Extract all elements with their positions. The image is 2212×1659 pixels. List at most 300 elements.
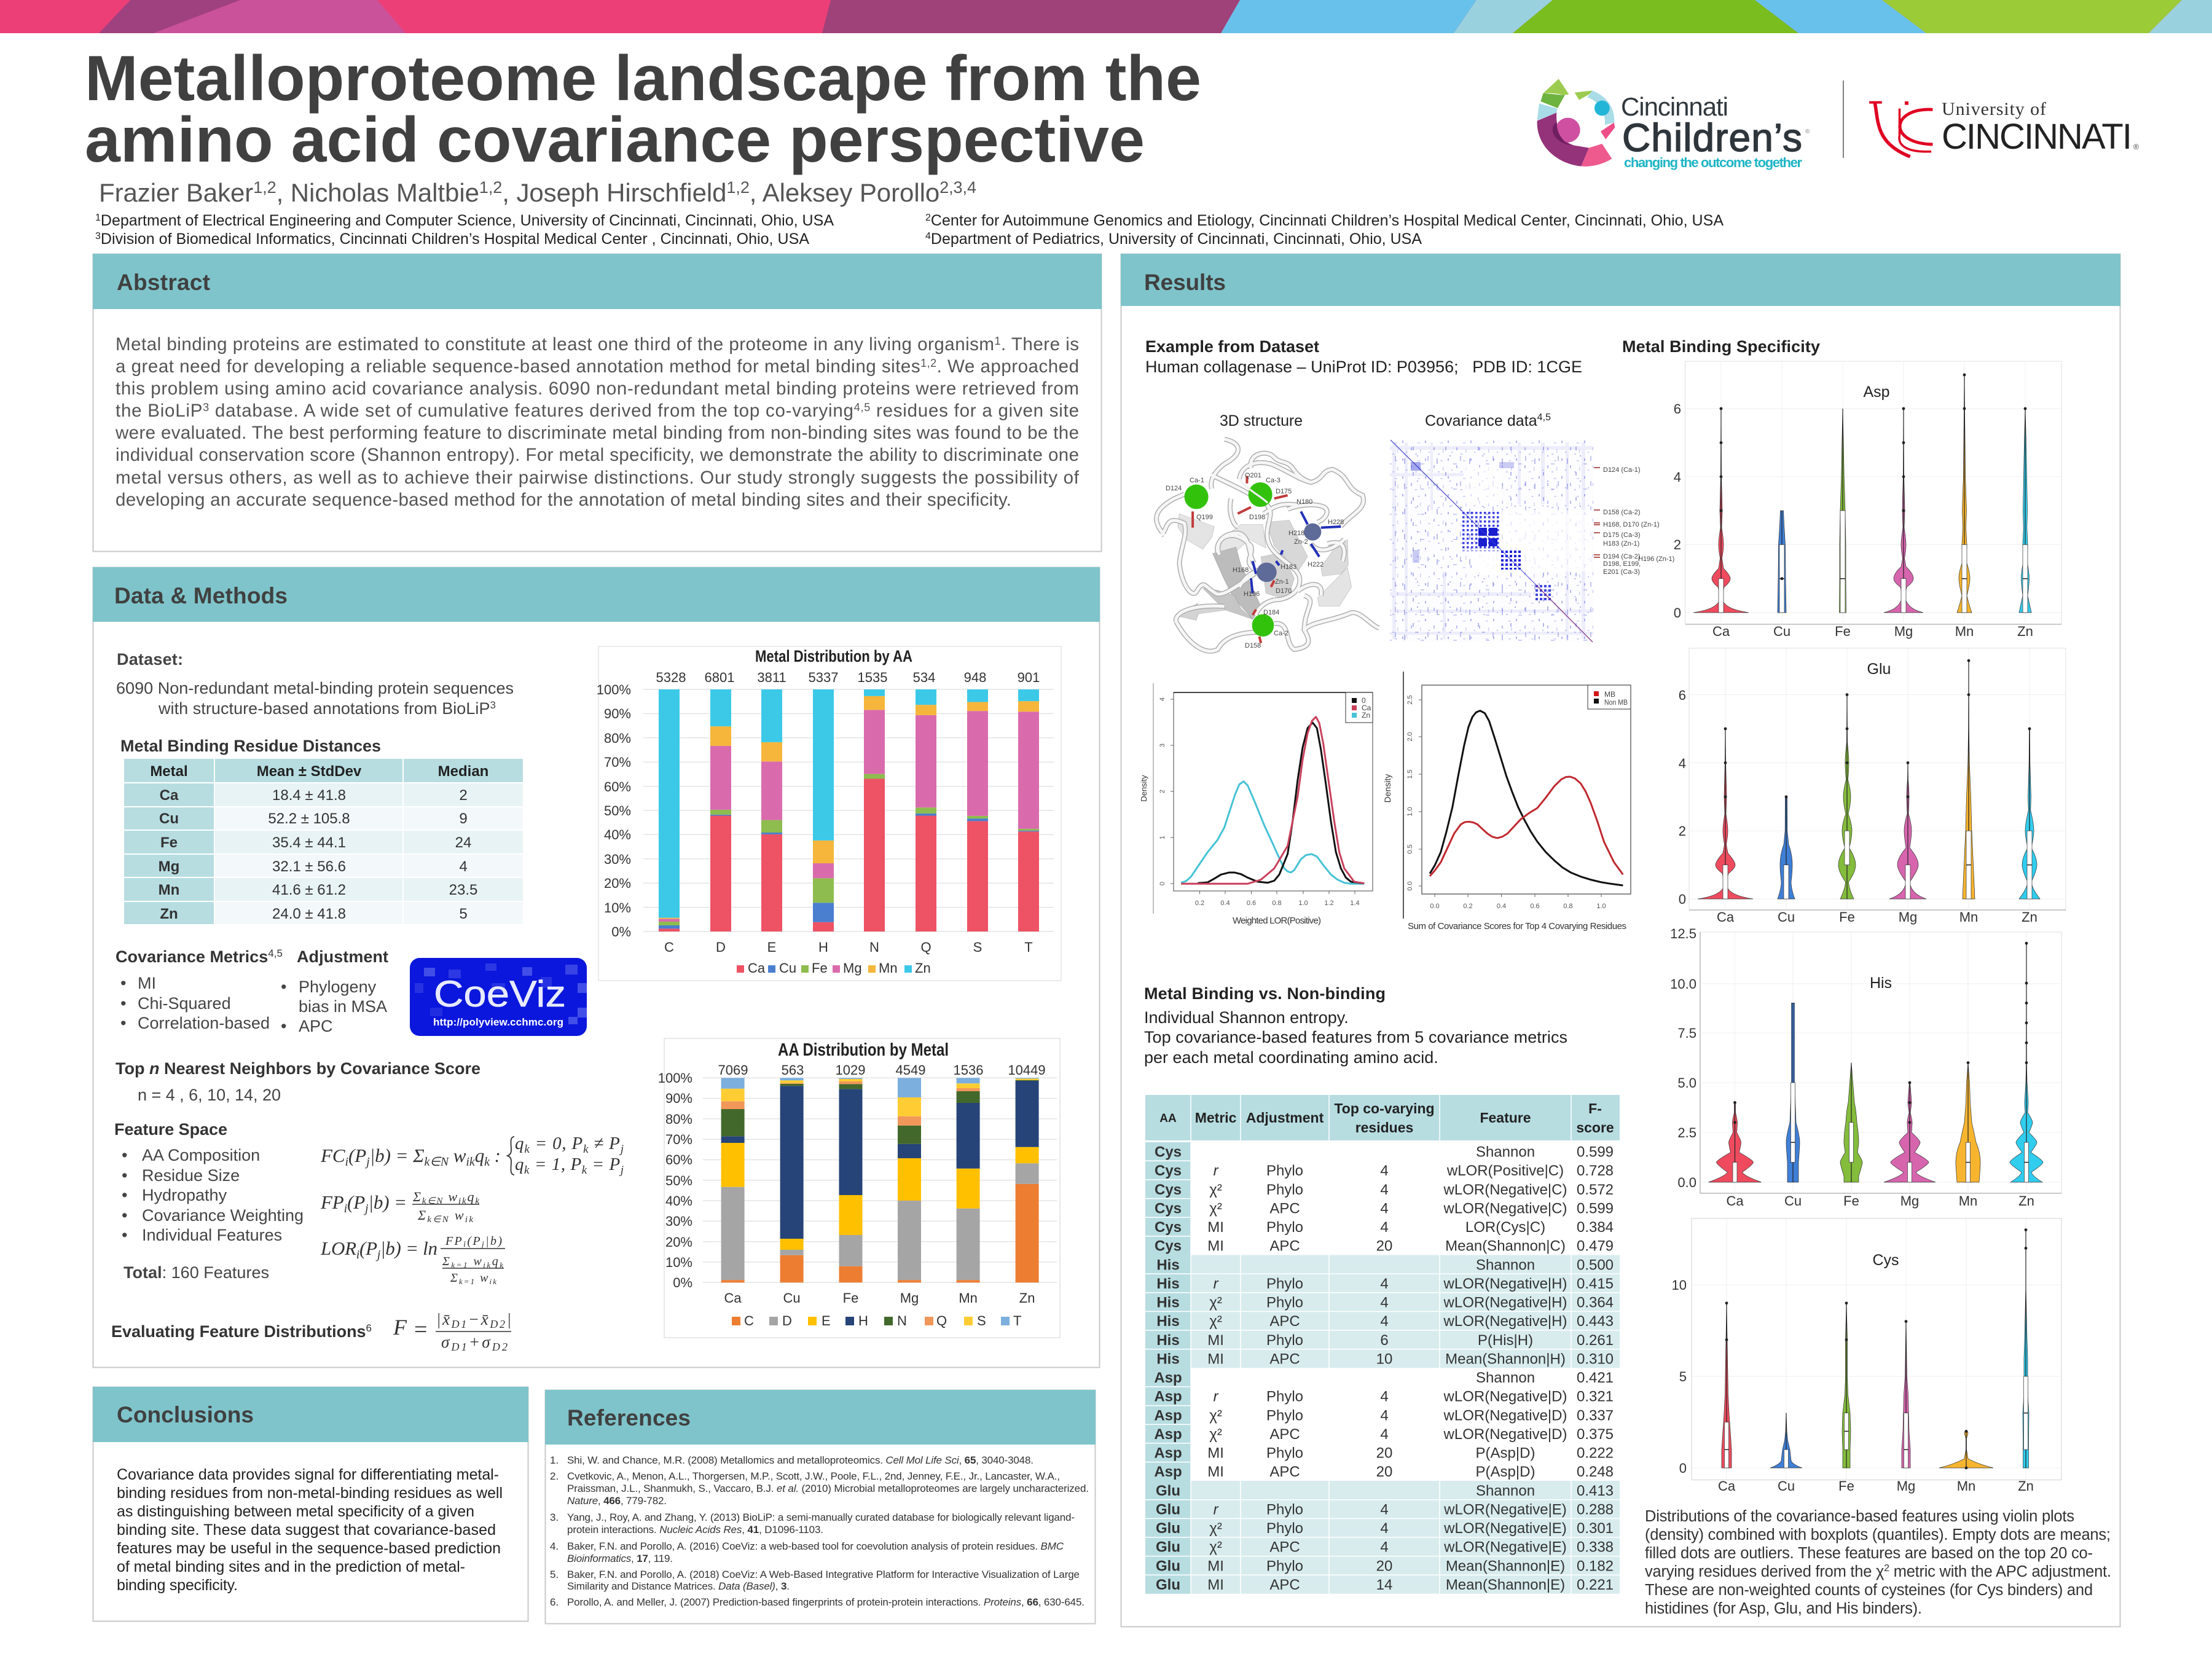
conclusions text: binding specificity. [117, 1577, 238, 1594]
heatmap residue labels: E201 (Ca-3) [1603, 568, 1640, 576]
authors: , Nicholas Maltbie [276, 178, 479, 207]
table rows: APC [1269, 1577, 1300, 1593]
axis labels [1674, 401, 2033, 639]
plot title: Asp [1863, 383, 1890, 401]
violin caption: metric with the APC adjustment. [1889, 1563, 2111, 1580]
table header: Metric [1195, 1110, 1237, 1126]
violin caption: (density) combined with boxplots (quantiles). Empty dots are means; [1645, 1526, 2111, 1543]
count labels: 7069 [718, 1062, 748, 1078]
equation: FC: = [587, 1155, 609, 1174]
abstract heading: Abstract [117, 270, 210, 295]
x axis labels: Fe [843, 1290, 858, 1306]
table rows: LOR(Cys|C) [1465, 1219, 1545, 1236]
conclusions heading: Conclusions [117, 1402, 254, 1427]
conclusions text: as distinguishing between metal specificity of a given [117, 1503, 474, 1520]
axis tick labels: 0.4 [1220, 900, 1230, 907]
legend: Mg [843, 960, 862, 976]
table header: AA [1159, 1112, 1177, 1125]
table rows: wLOR(Negative|E) [1443, 1520, 1567, 1537]
axis labels: 6 [1679, 688, 1686, 703]
axis labels: Zn [2022, 909, 2037, 925]
adjustment list [281, 947, 388, 1035]
affiliations: Department of Pediatrics, University of Cincinnati, Cincinnati, Ohio, USA [931, 230, 1422, 248]
residue distance table: 41.6 ± 61.2 [272, 882, 346, 898]
logo: Cincinnati Children's: changing the outcome together [1624, 155, 1802, 170]
residue labels: H228 [1328, 519, 1344, 526]
covariance heatmap [1390, 439, 1674, 643]
reference list: 3. [550, 1512, 559, 1523]
equation: FP [320, 1189, 479, 1225]
axis labels [1679, 688, 2037, 925]
y axis labels: 60% [665, 1152, 692, 1167]
table rows: 0.288 [1577, 1502, 1614, 1518]
legend: Fe [812, 960, 828, 976]
table rows: 0.182 [1577, 1558, 1614, 1574]
equation: FC: ≠ [589, 1134, 608, 1153]
dataset text: 3 [490, 699, 496, 711]
residue labels: Ca-3 [1266, 477, 1281, 484]
equation: FP: FP [321, 1191, 344, 1213]
violin plot: Asp [1674, 361, 2061, 639]
table rows: MI [1207, 1445, 1224, 1462]
table rows: APC [1269, 1313, 1300, 1330]
table header: Adjustment [1246, 1110, 1324, 1126]
x axis labels: D [716, 939, 726, 955]
table rows: Cys [1155, 1219, 1182, 1236]
example from dataset text: Human collagenase – UniProt ID: P03956; PDB ID: 1CGE [1145, 358, 1582, 376]
authors: 1,2 [479, 178, 502, 197]
affiliations: 4 [925, 231, 931, 241]
y axis labels: 100% [597, 682, 631, 697]
authors: 2,3,4 [939, 178, 976, 197]
metal binding vs non-binding text [1144, 984, 1567, 1067]
table rows: 0.375 [1577, 1426, 1614, 1443]
table rows: 0.415 [1577, 1276, 1614, 1292]
x axis labels: T [1024, 939, 1033, 955]
axis labels: 5 [1679, 1369, 1687, 1384]
axis titles: Density [1382, 774, 1392, 802]
abstract text: the BioLiP [116, 401, 202, 421]
results header [1121, 254, 2120, 306]
equation: LOR: Σ [450, 1271, 458, 1285]
reference list: Yang, J., Roy, A. and Zhang, Y. (2013) BioLiP: a semi-manually curated database for biologically relevant ligand- [567, 1512, 1075, 1523]
table rows: MI [1207, 1219, 1224, 1236]
table rows: Phylo [1266, 1445, 1303, 1462]
count labels: 3811 [757, 670, 786, 685]
table rows: Asp [1154, 1407, 1182, 1424]
count labels: 1536 [954, 1062, 983, 1078]
abstract text: Metal binding proteins are estimated to constitute at least one third of the proteome in any living organism [116, 334, 994, 355]
count labels: 6801 [705, 670, 734, 685]
axis labels: Cu [1778, 909, 1795, 925]
violin caption: filled dots are outliers. These features are based on the top 20 co- [1645, 1545, 2093, 1562]
count labels [656, 670, 1040, 685]
equation: F score: − [468, 1310, 479, 1328]
y axis labels: 80% [604, 731, 631, 746]
table rows: APC [1269, 1426, 1300, 1443]
axis tick labels: 0.0 [1430, 903, 1440, 910]
axis tick labels: 0.0 [1406, 881, 1414, 891]
adjustment list: APC [299, 1017, 333, 1035]
residue labels: H222 [1308, 561, 1324, 568]
legend: Zn [1362, 711, 1370, 720]
table rows: 4 [1380, 1313, 1389, 1330]
residue labels: D158 [1245, 642, 1261, 649]
reference list: Nature, 466, 779-782. [567, 1495, 667, 1507]
residue distance table: Mean ± StdDev [257, 763, 362, 780]
table rows: His [1156, 1332, 1180, 1349]
residue distance table: 52.2 ± 105.8 [268, 810, 350, 827]
table rows: 0.261 [1577, 1332, 1614, 1349]
table rows: Asp [1154, 1426, 1182, 1443]
y axis labels: 90% [665, 1091, 692, 1106]
equation: FP: Σ [412, 1189, 421, 1204]
plot title: Glu [1867, 661, 1891, 678]
covariance metrics list: MI [138, 974, 156, 992]
abstract text: 1 [995, 335, 1001, 347]
axis labels: Ca [1717, 909, 1735, 925]
equation: LOR: w [469, 1255, 482, 1268]
legend: Zn [915, 960, 931, 976]
legend: E [822, 1313, 831, 1328]
table rows: χ² [1209, 1520, 1222, 1537]
axis labels: 0 [1679, 1461, 1687, 1476]
covariance metrics list: • [120, 994, 126, 1013]
equation: FP: b) = [374, 1191, 407, 1213]
table rows: 0.337 [1577, 1407, 1614, 1424]
reference list: 2. [550, 1470, 559, 1482]
table rows: 20 [1376, 1445, 1392, 1462]
axis tick labels: 0.4 [1497, 903, 1506, 910]
abstract header [93, 254, 1102, 309]
residue labels: D198 [1249, 514, 1265, 521]
axis labels: Fe [1835, 624, 1851, 639]
x axis labels: N [869, 939, 879, 955]
density curves [1181, 717, 1364, 884]
table rows: 0.221 [1577, 1577, 1614, 1593]
equation: FC: q [515, 1155, 524, 1174]
covariance metrics list: 4,5 [268, 947, 283, 959]
table rows: 0.248 [1577, 1464, 1614, 1480]
stacked bars [659, 689, 1039, 931]
x axis labels: H [818, 939, 828, 955]
table rows: 4 [1380, 1219, 1389, 1236]
data and methods heading: Data & Methods [114, 583, 288, 608]
axis labels: Zn [2018, 1478, 2034, 1494]
equation: FP: k [475, 1196, 479, 1206]
authors: , Joseph Hirschfield [502, 178, 726, 207]
abstract text: metal versus others, as well as to achieve their pairwise distinctions. Our study strongly suggests the possibility of [116, 468, 1080, 488]
y axis labels: 50% [604, 803, 631, 818]
table rows: r [1214, 1163, 1219, 1179]
equation: LOR: b) [490, 1234, 502, 1248]
residue distance table: 24 [455, 834, 471, 851]
table rows: His [1156, 1276, 1180, 1292]
results heading: Results [1144, 270, 1226, 295]
table rows: Mean(Shannon|H) [1445, 1351, 1566, 1367]
axis titles: Weighted LOR(Positive) [1233, 916, 1321, 926]
conclusions header [93, 1387, 528, 1442]
axis titles: Density [1139, 775, 1148, 802]
chart title: Metal Distribution by AA [755, 647, 912, 665]
equation: F score: σ [482, 1333, 490, 1351]
residue labels: D184 [1263, 609, 1279, 616]
axis labels [1672, 1277, 2034, 1494]
table rows: 0.413 [1577, 1483, 1614, 1499]
table rows: 0.572 [1577, 1182, 1614, 1198]
table rows: wLOR(Positive|C) [1446, 1163, 1564, 1179]
reference list: Bioinformatics, 17, 119. [567, 1553, 673, 1564]
table rows: Shannon [1476, 1144, 1535, 1160]
axis labels: 7.5 [1677, 1026, 1696, 1041]
equation: FC: k [524, 1143, 530, 1156]
y axis labels: 80% [665, 1112, 692, 1127]
axis labels: 0.0 [1677, 1175, 1696, 1190]
logo divider [1843, 80, 1844, 158]
reference list: 1. [550, 1454, 559, 1466]
plot title: Cys [1872, 1252, 1899, 1269]
table rows: χ² [1209, 1182, 1222, 1198]
violins [1708, 943, 2043, 1182]
table rows: APC [1269, 1464, 1300, 1480]
count labels: 948 [964, 670, 986, 685]
axis tick labels: 1.5 [1406, 769, 1414, 779]
table rows: Mean(Shannon|E) [1446, 1558, 1565, 1574]
x axis labels: Mg [900, 1290, 919, 1306]
table rows: 4 [1380, 1539, 1389, 1556]
panel: results [1121, 254, 2120, 1627]
axis labels: Zn [2018, 1193, 2034, 1209]
chart: metal distribution by AA [597, 646, 1061, 981]
residue distance table: 18.4 ± 41.8 [272, 787, 346, 804]
table rows: P(Asp|D) [1476, 1445, 1535, 1462]
violins [1722, 1285, 2029, 1468]
y axis labels: 20% [665, 1234, 692, 1250]
axis labels: 0 [1679, 892, 1686, 907]
covariance metrics list: • [120, 974, 126, 992]
table rows: 4 [1380, 1520, 1389, 1537]
legend: N [897, 1313, 907, 1328]
table rows: Phylo [1266, 1294, 1303, 1311]
residue distance table: 2 [459, 787, 468, 804]
feature space list: AA Composition [142, 1146, 260, 1164]
equation: F score: x̄ [481, 1310, 488, 1328]
axis labels: Fe [1843, 1193, 1859, 1209]
axis tick labels: 0.2 [1463, 903, 1473, 910]
axis labels: 12.5 [1670, 926, 1696, 941]
equation: FP: q [467, 1189, 474, 1204]
table rows: 4 [1380, 1276, 1389, 1292]
table rows: 0.421 [1577, 1370, 1614, 1386]
equation: FC: P [572, 1134, 582, 1153]
covariance metrics list: Covariance Metrics [116, 947, 268, 966]
residue distance table: 35.4 ± 44.1 [272, 834, 346, 851]
equation: LOR: P [473, 1234, 480, 1248]
abstract text: 1,2 [920, 357, 936, 369]
axis titles [1139, 775, 1321, 926]
equation: FP: P [353, 1191, 365, 1213]
axis labels: Ca [1718, 1478, 1736, 1494]
heatmap residue labels [1594, 466, 1674, 576]
panel: references [545, 1390, 1096, 1623]
heatmap residue labels: H183 (Zn-1) [1603, 540, 1639, 547]
residue labels: Ca-2 [1274, 630, 1288, 637]
table rows: wLOR(Negative|H) [1443, 1294, 1567, 1311]
equation: LOR: ik [490, 1277, 496, 1286]
axis tick labels: 0 [1159, 882, 1166, 885]
feature space list: Individual Features [142, 1226, 282, 1244]
legend: Ca [1362, 704, 1371, 712]
residue distance table: 9 [459, 810, 468, 827]
dataset text: with structure-based annotations from BioLiP [159, 699, 490, 718]
equation: FC: q [515, 1134, 524, 1153]
boxplots [1723, 659, 2032, 899]
legend: Non MB [1604, 698, 1628, 707]
icon: CoeViz logo: CoeViz [434, 973, 566, 1014]
residue distance table: 4 [459, 858, 468, 875]
metal binding vs non-binding text: per each metal coordinating amino acid. [1144, 1048, 1438, 1067]
residue labels: N180 [1296, 498, 1312, 506]
y axis labels: 50% [665, 1173, 692, 1188]
table rows: Glu [1156, 1502, 1180, 1518]
boxplots [1724, 1228, 2028, 1469]
dataset text: 6090 Non-redundant metal-binding protein sequences [116, 679, 514, 697]
equation: FC: j [364, 1155, 370, 1169]
axis tick labels: 0.5 [1406, 844, 1414, 854]
conclusions text: Covariance data provides signal for differentiating metal- [117, 1466, 499, 1483]
count labels: 901 [1018, 670, 1040, 685]
3D structure label: 3D structure [1220, 412, 1303, 429]
example from dataset text [1145, 337, 1582, 376]
authors: Frazier Baker [99, 178, 253, 207]
legend [1346, 692, 1373, 723]
feature space list: • [122, 1226, 127, 1244]
y axis labels: 40% [604, 827, 631, 842]
reference list: Praissman, J.L., Shanmukh, S., Vaccaro, B.J. et al. (2010) Microbial metalloproteomes are largely uncharacterized. [567, 1483, 1089, 1494]
reference list: Cvetkovic, A., Menon, A.L., Thorgersen, M.P., Scott, J.W., Poole, F.L., 2nd, Jenney, F.E., Jr., Lancaster, W.A., [567, 1470, 1060, 1482]
equation: LOR: P [366, 1237, 377, 1259]
legend: Q [936, 1313, 947, 1328]
table rows: Cys [1155, 1182, 1182, 1198]
residue distance table: 23.5 [449, 882, 477, 898]
table rows: 4 [1380, 1294, 1389, 1311]
table rows: Phylo [1266, 1558, 1303, 1574]
table rows: 0.321 [1577, 1389, 1614, 1405]
violin caption: histidines (for Asp, Glu, and His binders). [1645, 1600, 1922, 1617]
equation: LOR: | [485, 1234, 489, 1248]
conclusions text: features may be useful in the sequence-based prediction [117, 1540, 501, 1557]
equation: FP: ik [465, 1215, 473, 1225]
reference list: Baker, F.N. and Porollo, A. (2018) CoeViz: A Web-Based Integrative Platform for Interactive Visualization of Large [567, 1569, 1080, 1580]
logo: Cincinnati Children's: Children’s [1622, 116, 1802, 160]
axis tick labels: 0.8 [1272, 900, 1282, 907]
panel: abstract [93, 254, 1102, 552]
axis labels: Mg [1894, 624, 1913, 639]
x axis labels: Q [920, 939, 931, 955]
table rows: 0.222 [1577, 1445, 1614, 1462]
F-score table [1145, 1095, 1620, 1594]
y axis labels [658, 1070, 692, 1290]
table rows: wLOR(Negative|C) [1443, 1182, 1567, 1198]
evaluating feature distributions: 6 [366, 1322, 372, 1334]
table rows: His [1156, 1351, 1180, 1367]
violin caption: These are non-weighted counts of cysteines (for Cys binders) and [1645, 1582, 2093, 1599]
axis tick labels: 0.6 [1247, 900, 1256, 907]
equation: FC: P [609, 1134, 620, 1153]
table rows: His [1156, 1257, 1180, 1273]
table rows: 4 [1380, 1426, 1389, 1443]
feature space list: • [122, 1146, 127, 1164]
plot title: His [1870, 975, 1892, 992]
table rows: 0.500 [1577, 1257, 1614, 1273]
table rows: 0.479 [1577, 1238, 1614, 1255]
dataset text [116, 650, 514, 718]
table rows: Phylo [1266, 1276, 1303, 1292]
table rows: 0.599 [1577, 1200, 1614, 1217]
title: Metalloproteome landscape from the [85, 43, 1201, 114]
residue labels: H218 [1288, 530, 1304, 537]
data and methods header [93, 567, 1100, 622]
table rows: wLOR(Negative|E) [1443, 1539, 1567, 1556]
table rows: 4 [1380, 1407, 1389, 1424]
adjustment list: • [281, 1017, 286, 1035]
legend: D [782, 1313, 792, 1328]
table rows: 4 [1380, 1502, 1389, 1518]
equation: LOR: ( [359, 1237, 367, 1259]
y axis labels: 20% [604, 876, 631, 891]
axis labels [1670, 926, 2034, 1209]
axis labels: Cu [1773, 624, 1790, 639]
table rows: χ² [1209, 1313, 1222, 1330]
residue distance table: Ca [160, 787, 179, 804]
adjustment list: Phylogeny [299, 978, 377, 996]
density plot: covariance scores [1382, 672, 1631, 931]
nearest neighbors text [116, 1059, 480, 1104]
residue labels: Ca-1 [1190, 477, 1204, 484]
conclusions text [117, 1466, 503, 1594]
legend: C [744, 1313, 754, 1328]
heatmap residue labels: D175 (Ca-3) [1603, 531, 1641, 539]
y axis labels: 70% [604, 755, 631, 770]
legend: Cu [779, 960, 796, 976]
axis labels: Cu [1778, 1478, 1795, 1494]
legend: 0 [1362, 696, 1366, 705]
equation: LOR: j [480, 1240, 484, 1249]
equation: FC: ( [348, 1145, 356, 1166]
legend: Mn [879, 960, 898, 976]
references header [545, 1390, 1096, 1445]
x axis labels: C [664, 939, 674, 955]
feature space list: Covariance Weighting [142, 1206, 304, 1225]
residue distance table: Cu [159, 810, 179, 827]
density plot: weighted LOR [1139, 683, 1373, 926]
equation: F score: D2 [492, 1341, 508, 1353]
y axis labels: 0% [611, 924, 631, 939]
table rows: χ² [1209, 1539, 1222, 1556]
equation: F score: D2 [489, 1318, 505, 1330]
equation: FC: | [370, 1145, 375, 1166]
table rows: 10 [1376, 1351, 1392, 1367]
table rows [1154, 1144, 1614, 1593]
table rows: Phylo [1266, 1182, 1303, 1198]
table rows: APC [1269, 1539, 1300, 1556]
equation: FC: P [355, 1145, 366, 1166]
equation: LOR: w [476, 1271, 488, 1285]
table rows: MI [1207, 1558, 1224, 1574]
covariance metrics list: Correlation-based [138, 1014, 270, 1032]
equation: FP: ik [458, 1196, 466, 1206]
residue labels: D175 [1276, 488, 1292, 495]
